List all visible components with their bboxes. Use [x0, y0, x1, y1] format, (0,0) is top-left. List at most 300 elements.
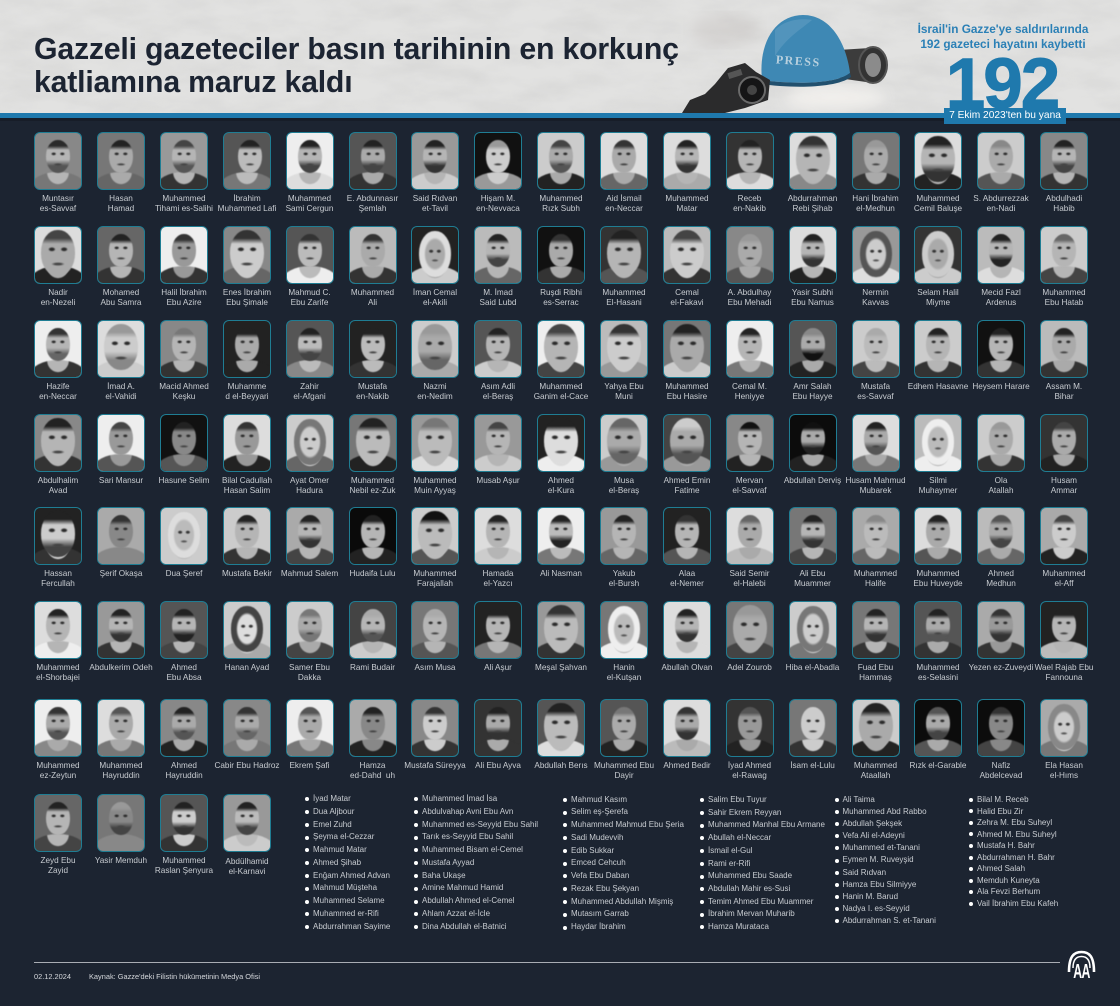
card: Husam Mahmud Mubarek: Husam Mahmud — [845, 476, 906, 485]
card: Asım Musa — [411, 601, 459, 685]
card: Muhammed Cemil Baluşe: Cemil Baluşe — [914, 204, 962, 213]
card: Ahmed Hayruddin — [160, 699, 208, 783]
card: Mustafa es-Savvaf: es-Savvaf — [857, 392, 894, 401]
name list column 6: Halid Ebu Zir — [977, 807, 1023, 816]
card: Said Semir el-Halebi — [726, 507, 774, 591]
card: Muhammed el-Shorbajei: el-Shorbajei — [36, 673, 80, 682]
card: İman Cemal el-Akili: İman Cemal — [413, 288, 457, 297]
name list column 6: Abdurrahman H. Bahr — [977, 853, 1055, 862]
card: Yasir Subhi Ebu Namus: Yasir Subhi — [792, 288, 833, 297]
date ribbon — [944, 108, 1066, 124]
card: Ali Ebu Muammer — [788, 507, 836, 591]
card: Amr Salah Ebu Hayye: Amr Salah — [793, 382, 832, 391]
card: Hişam M. en-Nevvaca — [474, 132, 522, 213]
name list column 6: Zehra M. Ebu Suheyl — [977, 818, 1052, 827]
card: Nazmi en-Nedim: Nazmi — [423, 382, 447, 391]
card: Bilal Cadullah Hasan Salim: Bilal Cadullah — [222, 476, 272, 485]
card: Mervan el-Savvaf — [726, 414, 774, 498]
card: Husam Mahmud Mubarek: Mubarek — [860, 486, 891, 495]
card: Aid İsmail en-Neccar — [600, 132, 648, 213]
card: Adel Zourob: Adel Zourob — [727, 663, 772, 672]
card: Muhammed Sami Cergun: Sami Cergun — [286, 204, 333, 213]
card: Mustafa Süreyya — [411, 699, 459, 783]
card: Hassan Fercullah: Fercullah — [41, 579, 75, 588]
card: Abdulhalim Avad: Avad — [49, 486, 67, 495]
name list column 1 — [313, 793, 390, 933]
card: S. Abdurrezzak en-Nadi — [973, 132, 1029, 213]
card: Muhammed Hayruddin: Muhammed — [99, 761, 143, 770]
card: İyad Ahmed el-Rawag: el-Rawag — [732, 771, 767, 780]
name list column 3: Haydar İbrahim — [571, 922, 626, 931]
card: İbrahim Muhammed Lafi: İbrahim — [233, 194, 261, 203]
card: Asım Adli el-Beraş: Asım Adli — [481, 382, 515, 391]
name list column 6 — [977, 794, 1058, 909]
card: Mustafa Süreyya: Mustafa Süreyya — [404, 761, 466, 770]
card: Selam Halil Miyme — [914, 226, 962, 307]
card: Samer Ebu Dakka: Samer Ebu — [289, 663, 330, 672]
stat caption — [918, 22, 1088, 51]
name list column 5: Hamza Ebu Silmiyye — [842, 880, 916, 889]
name list column 4: Muhammed Manhal Ebu Armane — [708, 820, 825, 829]
card: Musab Aşur: Musab Aşur — [476, 476, 520, 485]
name list column 1: İyad Matar — [313, 794, 351, 803]
name list column 5: Abdullah Şekşek — [842, 819, 902, 828]
card: Abullah Olvan: Abullah Olvan — [662, 663, 712, 672]
helmet label: PRESS — [775, 52, 821, 70]
card: Muhammed Tihami es-Salihi — [155, 132, 213, 213]
card: Muhammed Cemil Baluşe — [914, 132, 962, 213]
card: Nermin Kavvas — [852, 226, 900, 307]
card: Selam Halil Miyme: Miyme — [926, 298, 950, 307]
card: Nermin Kavvas: Nermin — [862, 288, 889, 297]
card: Hişam M. en-Nevvaca: en-Nevvaca — [476, 204, 520, 213]
card: Wael Rajab Ebu Fannouna — [1040, 601, 1088, 685]
card: Muhammed Ebu Huveyde — [914, 507, 962, 591]
icon: camera lens — [838, 47, 887, 83]
card: E. Abdunnasır Şemlah: E. Abdunnasır — [347, 194, 398, 203]
name list column 1: Abdurrahman Sayime — [313, 922, 390, 931]
name list column 1: Ahmed Şihab — [313, 858, 361, 867]
card: Amr Salah Ebu Hayye — [788, 320, 836, 404]
portrait row 3 — [0, 320, 1120, 410]
card: Muhammed Muin Ayyaş: Muhammed — [413, 476, 457, 485]
card: Macid Ahmed Keşku: Keşku — [173, 392, 195, 401]
card: Muhammed Matar: Muhammed — [665, 194, 709, 203]
card: Muhammed Sami Cergun: Muhammed — [288, 194, 331, 203]
card: Musa el-Beraş: Musa — [614, 476, 634, 485]
card: Husam Ammar — [1040, 414, 1088, 498]
card: Hani İbrahim el-Medhun: Hani İbrahim — [852, 194, 899, 203]
name list column 4: Muhammed Ebu Saade — [708, 871, 792, 880]
card: Heysem Harare — [977, 320, 1025, 404]
card: Sari Mansur: Sari Mansur — [99, 476, 143, 485]
card: Asım Adli el-Beraş — [474, 320, 522, 404]
card: Muhammed Ebu Dayir: Muhammed Ebu — [594, 761, 654, 770]
card: Nadir en-Nezeli — [34, 226, 82, 307]
card: Muhammed Matar — [663, 132, 711, 213]
card: İbrahim Muhammed Lafi: Muhammed Lafi — [218, 204, 276, 213]
name list column 4: İsmail el-Gul — [708, 846, 752, 855]
card: Abdurrahman Rebi Şihab: Abdurrahman — [788, 194, 837, 203]
name list column 1: Emel Zuhd — [313, 820, 352, 829]
card: Aid İsmail en-Neccar: en-Neccar — [605, 204, 643, 213]
card: Cabir Ebu Hadroz — [223, 699, 271, 783]
card: Wael Rajab Ebu Fannouna: Fannouna — [1046, 673, 1082, 682]
card: İbrahim Muhammed Lafi — [218, 132, 276, 213]
card: Fuad Ebu Hammaş: Fuad Ebu — [858, 663, 893, 672]
card: Meşal Şahvan: Meşal Şahvan — [535, 663, 587, 672]
card: Fuad Ebu Hammaş: Hammaş — [859, 673, 892, 682]
card: Silmi Muhaymer: Muhaymer — [919, 486, 957, 495]
name list column 4: Hamza Murataca — [708, 922, 769, 931]
card: Yahya Ebu Muni — [600, 320, 648, 404]
card: Muhammed el-Shorbajei — [34, 601, 82, 685]
card: Şerif Okaşa: Şerif Okaşa — [100, 569, 142, 578]
name list column 2: Mustafa Ayyad — [422, 858, 474, 867]
name list column 3 — [571, 794, 684, 934]
card: Silmi Muhaymer — [914, 414, 962, 498]
card: Adel Zourob — [726, 601, 774, 685]
card: Muhammed Halife: Halife — [865, 579, 886, 588]
card: Ola Atallah — [977, 414, 1025, 498]
name list column 5: Vefa Ali el-Adeyni — [842, 831, 905, 840]
card: Muhammed Farajallah — [411, 507, 459, 591]
card: Muhammed Ataallah: Ataallah — [861, 771, 890, 780]
card: Ahmed Hayruddin: Hayruddin — [165, 771, 203, 780]
name list column 3: Sadi Mudevvih — [571, 833, 623, 842]
card: Cemal M. Heniyye: Heniyye — [735, 392, 764, 401]
card: Cemal el-Fakavi: el-Fakavi — [670, 298, 704, 307]
portrait row 5 — [0, 507, 1120, 597]
card: Muhammed el-Aff: Muhammed — [1042, 569, 1086, 578]
card: Hiba el-Abadla — [788, 601, 836, 685]
card: Rızk el-Garable — [914, 699, 962, 783]
card: Cemal M. Heniyye — [726, 320, 774, 404]
card: Ola Atallah: Ola — [995, 476, 1007, 485]
card: Muhammed Tihami es-Salihi: Tihami es-Salihi — [155, 204, 213, 213]
card: İmad A. el-Vahidi: el-Vahidi — [105, 392, 137, 401]
card: Muhammed Cemil Baluşe: Muhammed — [916, 194, 960, 203]
name list column 1: Mahmud Müşteha — [313, 883, 377, 892]
name list column 2: Abdullah Ahmed el-Cemel — [422, 896, 514, 905]
card: Muhammed El-Hasani: Muhammed — [602, 288, 646, 297]
card: Rami Budair — [348, 601, 396, 685]
card: Ali Aşur: Ali Aşur — [484, 663, 512, 672]
card: Ali Nasman: Ali Nasman — [540, 569, 582, 578]
card: Alaa el-Nemer — [663, 507, 711, 591]
card: Husam Ammar: Ammar — [1051, 486, 1077, 495]
card: Muhammed Nebil ez-Zuk — [348, 414, 396, 498]
title — [34, 33, 679, 99]
card: Mahmud Salem — [286, 507, 334, 591]
card: Said Rıdvan et-Tavil: et-Tavil — [422, 204, 448, 213]
name list column 5: Ali Taima — [842, 795, 875, 804]
card: Hassan Fercullah — [34, 507, 82, 591]
card: Nafiz Abdelcevad: Nafiz — [992, 761, 1010, 770]
card: Hamada el-Yazcı: Hamada — [483, 569, 513, 578]
name list column 3: Muhammed Mahmud Ebu Şeria — [571, 820, 684, 829]
name list column 3: Emced Cehcuh — [571, 858, 626, 867]
card: Mustafa en-Nakib: Mustafa — [358, 382, 387, 391]
card: Yasir Memduh: Yasir Memduh — [95, 856, 147, 865]
card: Ali Ebu Muammer: Muammer — [794, 579, 831, 588]
card: Ali Aşur — [474, 601, 522, 685]
card: Hamza ed-Dahd uh: Hamza — [360, 761, 385, 770]
name list column 4 — [708, 794, 825, 934]
card: Ola Atallah: Atallah — [988, 486, 1014, 495]
card: Assam M. Bihar: Assam M. — [1046, 382, 1082, 391]
card: Abdülhamid el-Karnavi: el-Karnavi — [229, 867, 265, 876]
card: Abdullah Berıs: Abdullah Berıs — [534, 761, 588, 770]
card: Mustafa Bekir: Mustafa Bekir — [222, 569, 272, 578]
card: Hanin el-Kutşan: el-Kutşan — [607, 673, 641, 682]
card: Muhammed Ebu Hasire: Ebu Hasire — [667, 392, 707, 401]
card: Halil İbrahim Ebu Azire — [160, 226, 208, 307]
card: Said Rıdvan et-Tavil — [411, 132, 459, 213]
portrait row 2 — [34, 226, 1088, 307]
card: Mahmud C. Ebu Zarife: Ebu Zarife — [291, 298, 328, 307]
card: Ayat Omer Hadura: Hadura — [296, 486, 323, 495]
card: Dua Şeref: Dua Şeref — [166, 569, 202, 578]
card: Macid Ahmed Keşku: Macid Ahmed — [159, 382, 209, 391]
card: Hiba el-Abadla: Hiba el-Abadla — [786, 663, 839, 672]
card: Mervan el-Savvaf: el-Savvaf — [732, 486, 767, 495]
card: Cemal M. Heniyye: Cemal M. — [732, 382, 767, 391]
card: Muhammed Nebil ez-Zuk: Nebil ez-Zuk — [350, 486, 395, 495]
name list column 6: Ala Fevzi Berhum — [977, 887, 1040, 896]
card: İman Cemal el-Akili — [411, 226, 459, 307]
card: Abdülhamid el-Karnavi: Abdülhamid — [225, 857, 269, 866]
stat caption: 192 gazeteci hayatını kaybetti — [920, 37, 1086, 51]
name list column 3: Rezak Ebu Şekyan — [571, 884, 639, 893]
card: Cabir Ebu Hadroz: Cabir Ebu Hadroz — [214, 761, 280, 770]
card: Bilal Cadullah Hasan Salim: Hasan Salim — [224, 486, 270, 495]
icon: press helmet — [761, 15, 851, 87]
card: Asım Musa: Asım Musa — [415, 663, 455, 672]
card: Nadir en-Nezeli: Nadir — [48, 288, 68, 297]
card: Muhammed es-Selasini: es-Selasini — [918, 673, 958, 682]
card: Ekrem Şafi — [286, 699, 334, 783]
card: Abdullah Berıs — [537, 699, 585, 783]
card: Muhammed es-Selasini — [914, 601, 962, 685]
portrait row 4 — [0, 414, 1120, 504]
card: Abdulkerim Odeh: Abdulkerim Odeh — [89, 663, 153, 672]
card: Mervan el-Savvaf: Mervan — [736, 476, 763, 485]
name list column 2: Dina Abdullah el-Batnici — [422, 922, 506, 931]
card: Ahmed Emin Fatime — [663, 414, 711, 498]
card: Receb en-Nakib: Receb — [738, 194, 761, 203]
card: Zahir el-Afgani: Zahir — [300, 382, 319, 391]
card: Muhammed el-Aff — [1040, 507, 1088, 591]
card: Mecid Fazl Ardenus: Mecid Fazl — [981, 288, 1021, 297]
card: Zeyd Ebu Zayid: Zeyd Ebu — [40, 856, 76, 865]
card: Amr Salah Ebu Hayye: Ebu Hayye — [792, 392, 833, 401]
card: Muhammed Rızk Subh — [537, 132, 585, 213]
icon: camera — [682, 63, 770, 113]
card: Musa el-Beraş: el-Beraş — [609, 486, 639, 495]
card: Muhammed Ebu Hatab: Muhammed — [1042, 288, 1086, 297]
card: Yahya Ebu Muni: Muni — [615, 392, 633, 401]
card: Muhammed Muin Ayyaş — [411, 414, 459, 498]
card: E. Abdunnasır Şemlah: Şemlah — [359, 204, 386, 213]
card: İman Cemal el-Akili: el-Akili — [423, 298, 447, 307]
card: Muhammed Ebu Huveyde: Muhammed — [916, 569, 960, 578]
card: Ela Hasan el-Hıms: Ela Hasan — [1045, 761, 1083, 770]
card: Muntasır es-Savvaf: Muntasır — [42, 194, 74, 203]
name list column 2: Muhammed es-Seyyid Ebu Sahil — [422, 820, 538, 829]
card: Abdülhamid el-Karnavi — [223, 794, 271, 878]
card: Muhammed Rızk Subh: Rızk Subh — [542, 204, 580, 213]
card: Muhammed el-Beyyari — [223, 320, 271, 404]
card: Muntasır es-Savvaf: es-Savvaf — [40, 204, 76, 213]
name list column 3: Selim eş-Şerefa — [571, 807, 628, 816]
card: Selam Halil Miyme: Selam Halil — [917, 288, 959, 297]
name list column 5: Muhammed et-Tanani — [842, 843, 920, 852]
card: Abdulhadi Habib: Abdulhadi — [1046, 194, 1082, 203]
card: Zahir el-Afgani: el-Afgani — [293, 392, 326, 401]
name list column 4: Rami er-Rifi — [708, 859, 750, 868]
card: Muhammed Sami Cergun — [286, 132, 334, 213]
card: Muhammed Ebu Hasire — [663, 320, 711, 404]
card: Ruşdi Ribhi es-Serrac: es-Serrac — [543, 298, 579, 307]
card: Abdulhalim Avad: Abdulhalim — [38, 476, 78, 485]
stat block: 192 journalists — [918, 22, 1088, 124]
date ribbon: 7 Ekim 2023'ten bu yana — [949, 110, 1061, 121]
card: Ahmed Medhun: Medhun — [986, 579, 1016, 588]
card: Cemal el-Fakavi — [663, 226, 711, 307]
name list column 5: Hanin M. Barud — [842, 892, 898, 901]
card: İmad A. el-Vahidi: İmad A. — [107, 382, 135, 391]
card: Halil İbrahim Ebu Azire: Halil İbrahim — [161, 288, 207, 297]
card: Macid Ahmed Keşku — [160, 320, 208, 404]
card: Muhammed Rızk Subh: Muhammed — [539, 194, 583, 203]
card: Muhammed es-Selasini: Muhammed — [916, 663, 960, 672]
card: Hamza ed-Dahd uh — [348, 699, 396, 783]
card: Ayat Omer Hadura — [286, 414, 334, 498]
card: Ahmed el-Kura: el-Kura — [548, 486, 574, 495]
name list column 3: Mahmud Kasım — [571, 794, 627, 804]
card: Muhammed Tihami es-Salihi: Muhammed — [162, 194, 206, 203]
card: Hasune Selim — [160, 414, 208, 498]
card: Hamada el-Yazcı: el-Yazcı — [484, 579, 512, 588]
card: Muhammed Ebu Hasire: Muhammed — [665, 382, 709, 391]
card: Hudaifa Lulu: Hudaifa Lulu — [350, 569, 395, 578]
card: İyad Ahmed el-Rawag — [726, 699, 774, 783]
card: Nafiz Abdelcevad: Abdelcevad — [980, 771, 1022, 780]
name list column 6: Memduh Kuneyta — [977, 876, 1040, 885]
card: Said Semir el-Halebi: Said Semir — [729, 569, 770, 578]
card: Hanin el-Kutşan — [600, 601, 648, 685]
card: Muhammed ez-Zeytun: ez-Zeytun — [40, 771, 76, 780]
card: Abdurrahman Rebi Şihab — [788, 132, 837, 213]
card: Hasune Selim: Hasune Selim — [159, 476, 209, 485]
card: Ruşdi Ribhi es-Serrac — [537, 226, 585, 307]
portrait row 8 — [0, 794, 280, 884]
card: Nazmi en-Nedim: en-Nedim — [417, 392, 453, 401]
name list column 3: Vefa Ebu Daban — [571, 871, 629, 880]
card: Ahmed Medhun — [977, 507, 1025, 591]
card: Hassan Fercullah: Hassan — [44, 569, 72, 578]
card: Rami Budair: Rami Budair — [350, 663, 395, 672]
card: Hani İbrahim el-Medhun: el-Medhun — [856, 204, 895, 213]
card: Abdulkerim Odeh — [97, 601, 145, 685]
card: Mohamed Abu Samra: Mohamed — [103, 288, 139, 297]
name list column 5: Muhammed Abd Rabbo — [842, 807, 927, 816]
card: Muhammed el-Shorbajei: Muhammed — [36, 663, 80, 672]
card: Edhem Hasavne: Edhem Hasavne — [908, 382, 968, 391]
card: Muhammed Hayruddin: Hayruddin — [102, 771, 140, 780]
card: Zahir el-Afgani — [286, 320, 334, 404]
card: Ela Hasan el-Hıms — [1040, 699, 1088, 783]
card: Mahmud C. Ebu Zarife: Mahmud C. — [288, 288, 331, 297]
card: S. Abdurrezzak en-Nadi: en-Nadi — [987, 204, 1015, 213]
card: Assam M. Bihar — [1040, 320, 1088, 404]
card: Muhammed Muin Ayyaş: Muin Ayyaş — [414, 486, 456, 495]
card: Abdulhadi Habib — [1040, 132, 1088, 213]
card: Abdulhalim Avad — [34, 414, 82, 498]
card: Wael Rajab Ebu Fannouna: Wael Rajab Ebu — [1035, 663, 1093, 672]
portrait row 1 — [34, 132, 1088, 213]
name list column 1: Dua Aljbour — [313, 807, 354, 816]
card: Muhammed Ali: Ali — [368, 298, 377, 307]
card: Samer Ebu Dakka — [286, 601, 334, 685]
card: Cemal el-Fakavi: Cemal — [675, 288, 699, 297]
card: Ruşdi Ribhi es-Serrac: Ruşdi Ribhi — [540, 288, 582, 297]
card: Muhammed ez-Zeytun — [34, 699, 82, 783]
card: Abdulhadi Habib: Habib — [1053, 204, 1075, 213]
icon: AA logo — [1067, 950, 1096, 980]
card: Hazife en-Neccar: en-Neccar — [39, 392, 77, 401]
name list column 4: Sahir Ekrem Reyyan — [708, 808, 781, 817]
card: Muhammed Hayruddin — [97, 699, 145, 783]
card: Hazife en-Neccar — [34, 320, 82, 404]
card: Enes İbrahim Ebu Şimale: Ebu Şimale — [226, 298, 268, 307]
card: Yasir Memduh — [97, 794, 145, 878]
card: İsam el-Lulu: İsam el-Lulu — [790, 761, 835, 770]
name list column 1: Mahmud Matar — [313, 845, 367, 854]
card: Ela Hasan el-Hıms: el-Hıms — [1050, 771, 1078, 780]
name list column 2: Ahlam Azzat el-İcle — [422, 909, 490, 918]
card: Muhammed Halife — [852, 507, 900, 591]
card: Said Rıdvan et-Tavil: Said Rıdvan — [413, 194, 457, 203]
card: Muhammed Raslan Şenyura: Muhammed — [162, 856, 206, 865]
name list column 3: Mutasım Garrab — [571, 909, 629, 918]
card: Muhammed ez-Zeytun: Muhammed — [36, 761, 80, 770]
card: Hazife en-Neccar: Hazife — [46, 382, 70, 391]
card: Mohamed Abu Samra: Abu Samra — [101, 298, 141, 307]
card: Muhammed el-Beyyari: d el-Beyyari — [225, 392, 269, 401]
card: Abdullah Derviş: Abdullah Derviş — [784, 476, 841, 485]
card: Ali Ebu Ayva — [474, 699, 522, 783]
card: Muhammed Halife: Muhammed — [854, 569, 897, 578]
card: Ahmed el-Kura — [537, 414, 585, 498]
blue stripe — [0, 113, 1120, 118]
name list column 5: Nadya I. es-Seyyid — [842, 904, 910, 913]
card: Receb en-Nakib — [726, 132, 774, 213]
card: Muhammed Ataallah — [852, 699, 900, 783]
card: Muhammed Ali: Muhammed — [351, 288, 394, 297]
card: İsam el-Lulu — [788, 699, 836, 783]
name list column 1: Enğam Ahmed Advan — [313, 871, 390, 880]
card: Muhammed el-Aff: el-Aff — [1055, 579, 1073, 588]
card: Muhammed Ebu Hatab: Ebu Hatab — [1045, 298, 1083, 307]
card: Muhammed Ebu Dayir: Dayir — [614, 771, 634, 780]
card: Hanan Ayad — [223, 601, 271, 685]
card: Mustafa en-Nakib — [348, 320, 396, 404]
card: Muhammed Ebu Hatab — [1040, 226, 1088, 307]
card: Ahmed Ebu Absa: Ebu Absa — [166, 673, 202, 682]
card: Husam Mahmud Mubarek — [852, 414, 900, 498]
